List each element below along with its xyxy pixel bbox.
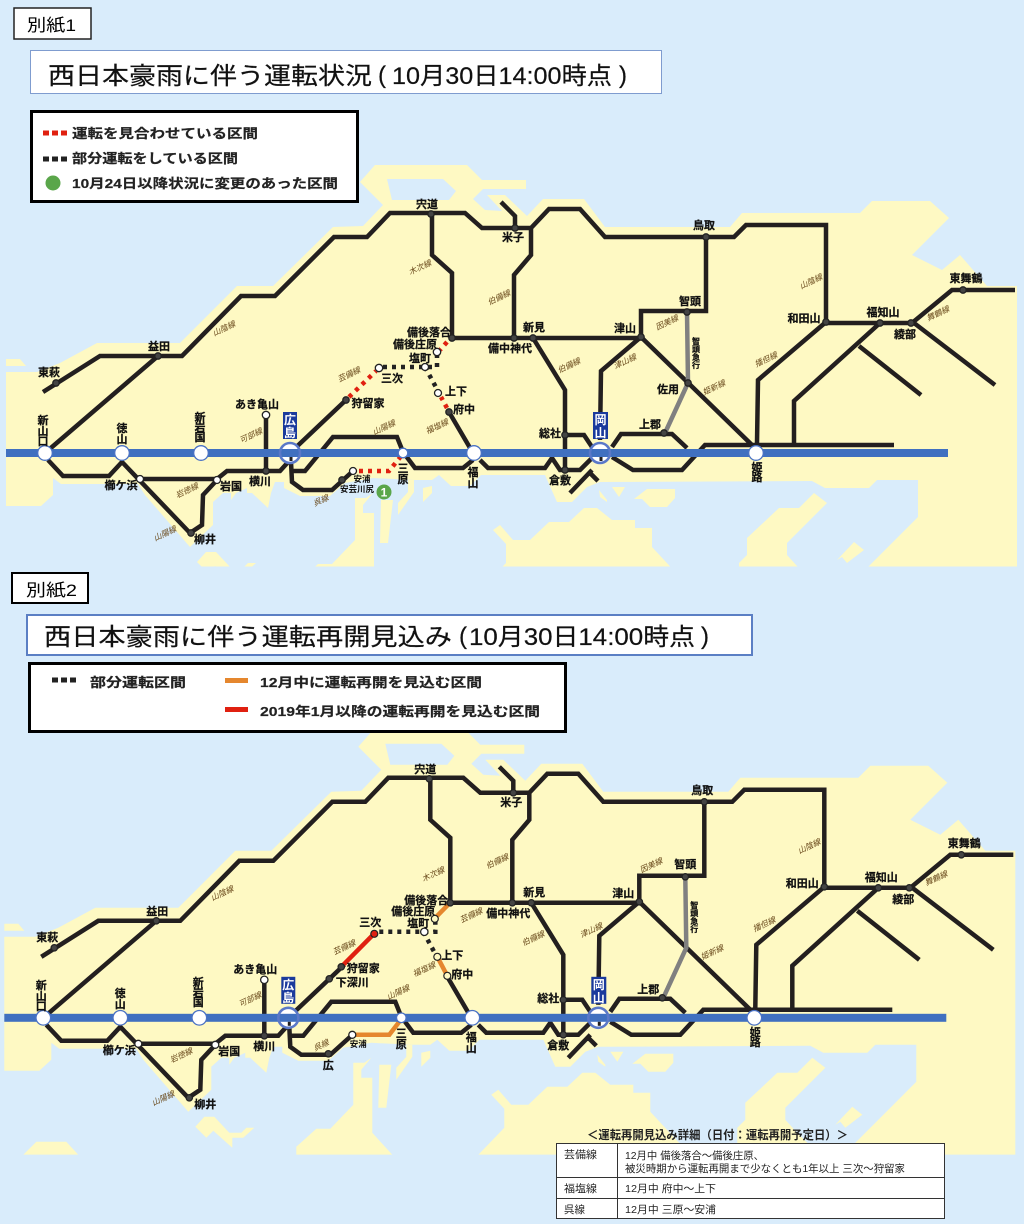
table: reopening details: 福塩線: [564, 1182, 598, 1195]
station names: [36, 762, 981, 1111]
callout: changed section marker: 1: [381, 486, 388, 500]
station names: 下深川: [336, 975, 369, 989]
station names: 三: [398, 463, 408, 475]
station names: 路: [750, 1035, 761, 1049]
line names: 頭: [690, 909, 698, 918]
line names: 津山線: [578, 921, 605, 940]
line names: 福塩線: [411, 960, 438, 979]
station names: 上郡: [639, 417, 661, 431]
line names: 山陽線: [152, 524, 179, 543]
station names: 国: [194, 431, 206, 444]
line names: 智: [692, 336, 700, 346]
label: Okayama: 山: [593, 991, 605, 1005]
line names: 福塩線: [424, 417, 451, 436]
line names: 頭: [692, 345, 700, 354]
tag: attachment 2: [12, 573, 88, 603]
legend: map 1: 運転を見合わせている区間: [72, 126, 258, 141]
station names: 徳: [115, 986, 126, 1000]
station names: 口: [38, 436, 48, 448]
station names: 上郡: [637, 982, 659, 996]
station names: 広: [323, 1059, 334, 1072]
title: reopening outlook: (: [459, 623, 467, 650]
land and sea map 1: [6, 165, 1017, 590]
station names: 備後落合: [404, 893, 448, 907]
line names: 山陰線: [211, 319, 238, 338]
callout: changed section marker: [376, 484, 392, 500]
station names: あき亀山: [235, 397, 279, 411]
station names: 塩町: [407, 916, 429, 930]
line names: 芸備線: [336, 365, 363, 384]
label: Hiroshima: [283, 412, 297, 440]
station names: 宍道: [414, 762, 436, 776]
label: Hiroshima: 島: [282, 990, 294, 1005]
station names: 山: [468, 477, 478, 490]
tag: attachment 1: [14, 8, 91, 39]
line names: 呉線: [312, 493, 331, 508]
station names: 総社: [537, 991, 559, 1005]
station names: 岩: [194, 420, 206, 434]
line names: 山陰線: [209, 884, 236, 903]
partial operation sections: [379, 922, 436, 956]
legend: map 2: [30, 664, 566, 732]
stations: [36, 776, 964, 1101]
line names: 舞鶴線: [923, 869, 950, 888]
station names: 岩国: [220, 479, 242, 493]
station names: 倉敷: [549, 473, 571, 487]
station names: 塩町: [409, 351, 431, 365]
table: reopening details: 12月中 府中～上下: [625, 1182, 716, 1195]
title: operating status: 西日本豪雨に伴う運転状況: [48, 63, 372, 90]
station names: 口: [36, 1001, 47, 1013]
map 1: rail status: [6, 165, 1017, 590]
heading: detail table: ＜運転再開見込み詳細（日付：運転再開予定日）＞: [587, 1127, 848, 1142]
title: operating status: (: [378, 62, 386, 89]
stations: [38, 211, 966, 536]
line names: 可部線: [238, 426, 265, 445]
line names: 急: [692, 352, 700, 362]
station names: 綾部: [892, 892, 914, 906]
station names: 福知山: [865, 870, 898, 884]
rail network map 2: [41, 767, 1013, 1098]
station names: 山: [36, 990, 47, 1003]
station names: 櫛ケ浜: [104, 478, 138, 492]
line names: 山陽線: [150, 1089, 177, 1108]
label: Okayama: 山: [594, 426, 607, 440]
table: reopening details: 12月中 備後落合～備後庄原、: [625, 1149, 764, 1162]
legend: map 2: 2019年1月以降の運転再開を見込む区間: [260, 704, 540, 719]
shinkansen line: [6, 449, 948, 457]
station names: 東萩: [38, 365, 60, 379]
label: Hiroshima: 島: [284, 425, 296, 440]
station names: 佐用: [657, 382, 679, 396]
station names: 山: [466, 1042, 477, 1055]
label: Hiroshima: 広: [282, 978, 294, 992]
label: Hiroshima: [281, 977, 295, 1005]
reopening after January 2019 in red: [343, 934, 374, 965]
legend: map 1: [32, 112, 358, 202]
table: reopening details: [556, 1143, 945, 1219]
station names: 東舞鶴: [948, 836, 981, 850]
map 2: reopening outlook: [4, 730, 1015, 1155]
station names: 倉敷: [547, 1038, 569, 1052]
station names: 新見: [523, 320, 545, 334]
station names: 横川: [249, 474, 271, 488]
label: Hiroshima: 広: [284, 413, 296, 427]
station names: 山: [115, 998, 126, 1011]
station names: 府中: [453, 402, 475, 416]
station names: 狩留家: [347, 961, 380, 975]
station names: 柳井: [194, 532, 216, 546]
table: reopening details: 芸備線: [564, 1148, 598, 1161]
station names: 横川: [253, 1039, 275, 1053]
line names: 岩徳線: [174, 481, 201, 500]
December reopening sections in orange: [352, 903, 450, 1035]
station names: 新見: [523, 885, 545, 899]
station names: 三次: [359, 915, 381, 929]
station names: 米子: [500, 795, 522, 809]
legend: map 1: 部分運転をしている区間: [72, 151, 238, 166]
station names: 鳥取: [691, 783, 713, 797]
title: operating status: 10月30日14:00時点: [392, 63, 612, 90]
line names: 急: [690, 916, 698, 926]
station names: 備後庄原: [391, 904, 435, 918]
line names: 津山線: [612, 352, 639, 371]
line names: 山陰線: [796, 837, 823, 856]
line names: 姫新線: [699, 943, 726, 962]
station names: 徳: [116, 421, 128, 435]
tag: attachment 1: 別紙1: [27, 16, 76, 35]
legend: map 1: 10月24日以降状況に変更のあった区間: [72, 176, 338, 191]
station names: 津山: [614, 321, 636, 335]
label: Okayama: [591, 977, 606, 1005]
station names: 路: [752, 470, 762, 484]
table: reopening details: 12月中 三原～安浦: [625, 1203, 717, 1216]
line names: 岩徳線: [168, 1046, 195, 1065]
title: operating status: [30, 50, 662, 94]
line names: 智: [690, 900, 698, 910]
station names: 柳井: [194, 1097, 216, 1111]
line names: 播但線: [753, 350, 780, 369]
station names: 東萩: [36, 930, 58, 944]
line names: 呉線: [312, 1038, 331, 1053]
legend: map 2: 部分運転区間: [90, 675, 186, 690]
partial operation sections in black: [383, 355, 438, 391]
line names: 因美線: [638, 856, 665, 875]
station names: 姫: [750, 1025, 761, 1039]
line names: 伯備線: [486, 288, 513, 307]
line names: 芸備線: [331, 938, 358, 957]
station names: 山: [116, 433, 128, 446]
line names: 山陽線: [371, 418, 398, 437]
line names: 木次線: [420, 865, 447, 884]
station names: 綾部: [894, 327, 916, 341]
station names: 櫛ケ浜: [103, 1043, 136, 1057]
line names: 伯備線: [556, 356, 583, 375]
line names: 姫新線: [701, 378, 728, 397]
title: reopening outlook: ): [701, 623, 709, 650]
label: Okayama: 岡: [593, 978, 605, 992]
station names: 山: [38, 425, 48, 438]
line names: 舞鶴線: [925, 304, 952, 323]
tag: attachment 2: 別紙2: [26, 581, 77, 600]
station names: 新: [193, 975, 204, 989]
station names: 安浦: [353, 474, 371, 484]
station names: 米子: [502, 230, 524, 244]
line names: 伯備線: [484, 852, 511, 871]
station names: 姫: [752, 460, 762, 474]
station names: 福: [468, 465, 478, 479]
label: Okayama: 岡: [594, 413, 607, 427]
station names: 備中神代: [488, 341, 532, 355]
station names: 岩: [193, 985, 204, 999]
line names: 山陰線: [798, 272, 825, 291]
table: reopening details: 被災時期から運転再開まで少なくとも1年以上 三次～狩留家: [625, 1162, 905, 1175]
line names: [152, 258, 952, 543]
station names: [38, 197, 982, 546]
title: reopening outlook: 西日本豪雨に伴う運転再開見込み: [44, 624, 452, 651]
station names: 原: [398, 473, 408, 486]
station names: 新: [38, 413, 48, 427]
station names: 備後庄原: [393, 337, 437, 351]
title: operating status: ): [619, 62, 627, 89]
title: reopening outlook: [27, 615, 752, 655]
station names: 安浦: [350, 1039, 367, 1049]
station names: 鳥取: [693, 218, 715, 232]
station names: 安芸川尻: [340, 484, 374, 494]
station names: 岩国: [218, 1044, 240, 1058]
station names: 総社: [539, 426, 561, 440]
title: reopening outlook: 10月30日14:00時点: [469, 624, 695, 651]
station names: 上下: [441, 949, 463, 962]
line names: 木次線: [407, 258, 434, 277]
station names: 新: [194, 410, 206, 424]
shinkansen line: [4, 1014, 946, 1022]
station names: 三次: [381, 371, 403, 385]
station names: 宍道: [416, 197, 438, 211]
station names: 和田山: [788, 311, 820, 325]
station names: 智頭: [679, 294, 701, 308]
line names: 可部線: [237, 990, 264, 1009]
station names: 智頭: [674, 857, 696, 871]
table: reopening details: 呉線: [564, 1203, 585, 1216]
line names: 播但線: [751, 915, 778, 934]
station names: 福知山: [866, 305, 900, 319]
line names: 行: [692, 360, 700, 370]
land and sea map 2: [4, 730, 1015, 1155]
station names: あき亀山: [233, 962, 277, 976]
line names: 芸備線: [458, 906, 485, 925]
station names: 和田山: [786, 876, 819, 890]
station names: 東舞鶴: [950, 271, 982, 285]
station names: 三: [396, 1028, 407, 1040]
station names: 新: [36, 978, 47, 992]
label: Okayama: [593, 412, 608, 440]
line names: 因美線: [654, 313, 681, 332]
station names: 府中: [451, 967, 473, 981]
legend: map 2: 12月中に運転再開を見込む区間: [260, 675, 482, 690]
station names: 国: [193, 996, 204, 1009]
rail network map 1: [43, 202, 1015, 533]
station names: 狩留家: [352, 396, 384, 410]
station names: 福: [466, 1030, 477, 1044]
station names: 上下: [445, 385, 467, 398]
station names: 原: [396, 1038, 407, 1051]
line names: 行: [690, 924, 698, 934]
station names: 備後落合: [407, 325, 451, 339]
line names: 伯備線: [520, 929, 547, 948]
suspended sections in red: [349, 342, 447, 471]
station names: 備中神代: [486, 906, 530, 920]
station names: 益田: [146, 904, 168, 918]
line names: [150, 837, 950, 1108]
station names: 津山: [612, 886, 634, 900]
line names: 山陽線: [385, 983, 412, 1002]
station names: 益田: [148, 339, 170, 353]
